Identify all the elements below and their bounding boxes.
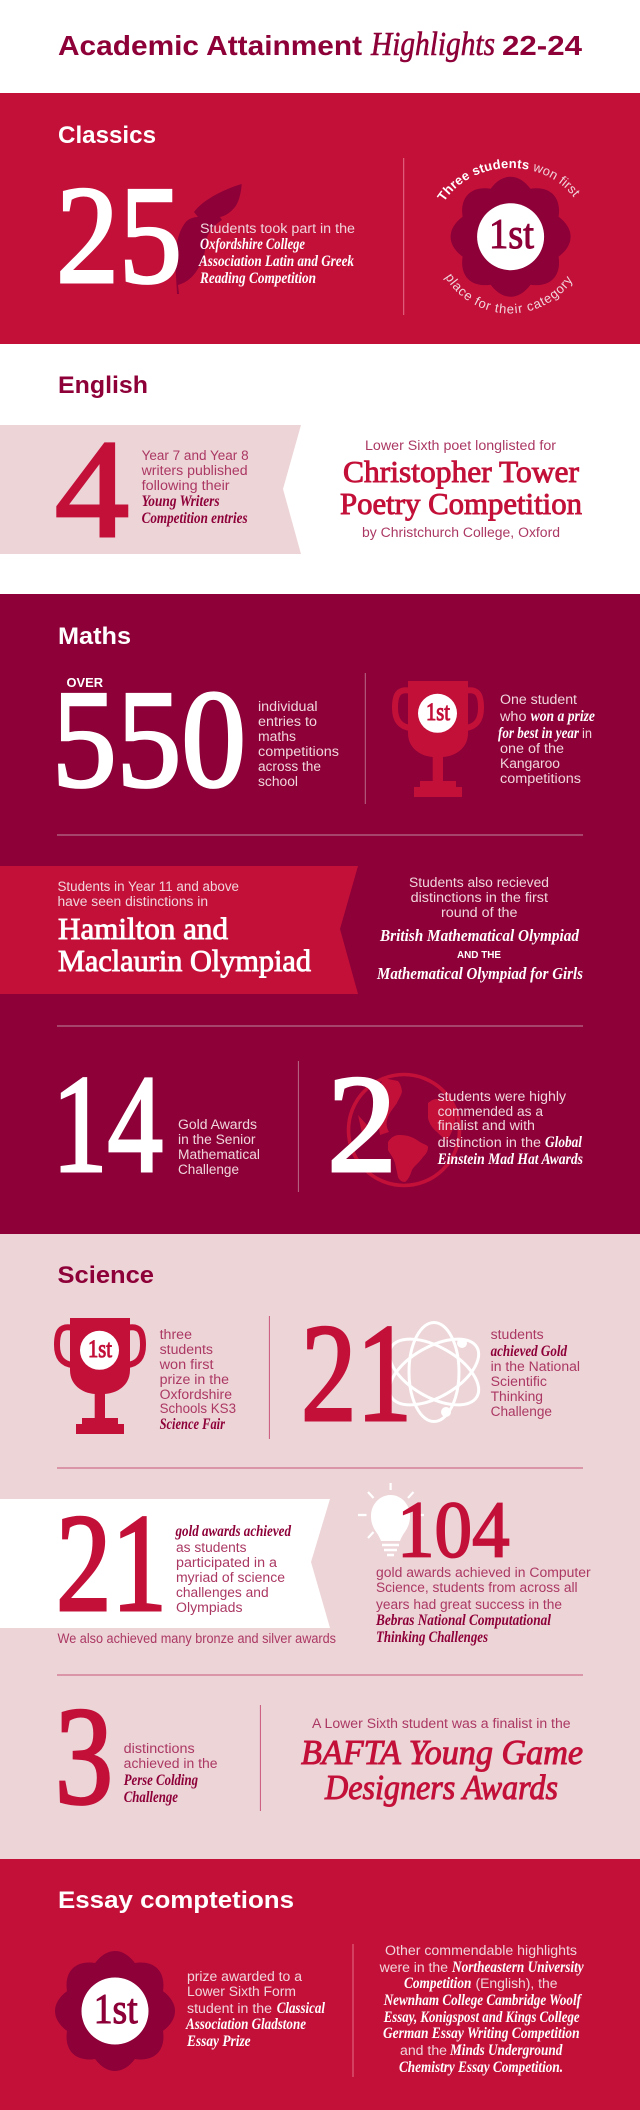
text block: individual entries: maths — [258, 729, 296, 744]
icon: globe — [348, 1074, 460, 1186]
text block: hamilton and maclaurin: Hamilton and — [58, 911, 228, 946]
panel: maths — [0, 594, 640, 1234]
text block: perse colding: Perse Colding — [123, 1772, 198, 1789]
text block: hamilton and maclaurin — [58, 879, 311, 978]
text block: reading competition: Reading Competition — [199, 270, 316, 287]
text block: bebras: gold awards achieved in Computer — [376, 1565, 591, 1580]
text block: national scientific thinking: in the National — [491, 1359, 580, 1374]
panel: science — [0, 1234, 640, 1859]
title: 22-24 — [502, 30, 582, 61]
text block: gladstone prize: Lower Sixth Form — [187, 1984, 296, 1999]
panel: classics — [0, 93, 640, 344]
text block: young writers: Year 7 and Year 8 — [142, 448, 249, 463]
text block: bebras: Thinking Challenges — [376, 1629, 488, 1646]
text block: kangaroo — [498, 692, 595, 786]
text block: gold awards achieved: challenges and — [176, 1585, 269, 1600]
text block: gold awards achieved — [175, 1523, 292, 1615]
text block: gold awards: Gold Awards — [178, 1117, 257, 1132]
text block: gladstone prize: student in the — [187, 2001, 272, 2016]
text block: science fair: Schools KS3 — [160, 1401, 236, 1416]
text block: other highlights: Essay, Konigspost and Kings College — [383, 2009, 580, 2026]
badge: first place — [55, 1951, 175, 2071]
text block: christopher tower: Poetry Competition — [340, 486, 582, 521]
text block: other highlights: and the — [400, 2043, 447, 2058]
badge: first place: 1st — [94, 1987, 138, 2033]
text block: gold awards achieved: participated in a — [176, 1555, 278, 1570]
text block: perse colding: Challenge — [124, 1789, 178, 1806]
text block: perse colding: distinctions — [124, 1741, 195, 1756]
text block: national scientific thinking — [491, 1327, 580, 1419]
title — [58, 26, 582, 63]
badge: first place: place for their category — [443, 274, 572, 314]
text block: christopher tower — [340, 438, 582, 540]
text block: bebras: Bebras National Computational — [375, 1612, 551, 1629]
text block: gold awards achieved: as students — [176, 1540, 247, 1555]
text block: national scientific thinking: achieved Gold — [491, 1343, 568, 1360]
text block: science fair: Science Fair — [160, 1416, 226, 1433]
badge: first place: 1st — [489, 212, 534, 258]
note: bronze and silver: We also achieved many bronze and silver awards — [58, 1631, 336, 1646]
icon: atom — [379, 1322, 489, 1422]
text block: science fair: won first — [159, 1357, 214, 1372]
text block: national scientific thinking: Thinking — [491, 1389, 543, 1404]
text block: reading competition: Oxfordshire College — [200, 236, 305, 253]
text block: national scientific thinking: students — [491, 1327, 544, 1342]
ribbon: white — [0, 1499, 330, 1628]
text block: perse colding — [123, 1741, 218, 1806]
text block: bafta: Designers Awards — [324, 1768, 558, 1807]
text block: perse colding: achieved in the — [124, 1756, 218, 1771]
text block: other highlights: Competition — [404, 1975, 471, 1992]
text block: kangaroo: who — [499, 709, 526, 724]
text block: young writers: Competition entries — [142, 510, 248, 527]
text block: gladstone prize: prize awarded to a — [187, 1969, 302, 1984]
text block: bebras — [375, 1565, 591, 1646]
icon: trophy: 1st — [426, 699, 450, 726]
text block: other highlights: Northeastern University — [451, 1959, 584, 1976]
text block: hamilton and maclaurin: Students in Year 11 and above — [58, 879, 239, 894]
text block: gladstone prize: Association Gladstone — [185, 2016, 306, 2033]
text block: british olympiad: British Mathematical Olympiad — [379, 926, 579, 945]
text block: gladstone prize — [185, 1969, 325, 2050]
icon: trophy — [395, 681, 481, 797]
text block: individual entries: school — [258, 774, 298, 789]
text block: gladstone prize: Essay Prize — [186, 2033, 251, 2050]
stat: 25: 25 — [56, 158, 182, 313]
text block: national scientific thinking: Scientific — [491, 1374, 547, 1389]
text block: reading competition: Students took part in the — [200, 221, 355, 236]
text block: gold awards: Mathematical — [178, 1147, 260, 1162]
text block: gladstone prize: Classical — [277, 2000, 325, 2017]
text block: science fair: three — [160, 1327, 192, 1342]
text block: individual entries — [258, 699, 339, 789]
title: Academic Attainment — [58, 30, 362, 61]
heading: science: Science — [58, 1262, 154, 1289]
text block: british olympiad: distinctions in the first — [411, 890, 548, 905]
text block: reading competition: Association Latin and Greek — [198, 253, 354, 270]
heading: classics: Classics — [58, 122, 156, 149]
text block: kangaroo: Kangaroo — [500, 756, 560, 771]
stat: 4: 4 — [55, 412, 129, 567]
stat: 14: 14 — [52, 1047, 163, 1202]
panel: essay competitions — [0, 1859, 640, 2110]
stat: 104: 104 — [397, 1486, 510, 1574]
text block: science fair: Oxfordshire — [160, 1387, 232, 1402]
text block: mad hat awards: Global — [545, 1134, 582, 1151]
text block: british olympiad: round of the — [441, 905, 518, 920]
heading: maths: Maths — [58, 623, 131, 650]
text block: hamilton and maclaurin: Maclaurin Olympiad — [58, 943, 311, 978]
stat: 550: 550 — [52, 662, 246, 817]
text block: kangaroo: for best in year — [498, 725, 580, 742]
icon: trophy — [57, 1318, 143, 1434]
ribbon: crimson — [0, 866, 358, 994]
text block: bafta: A Lower Sixth student was a finalist in the — [312, 1716, 571, 1731]
text block: hamilton and maclaurin: have seen distinctions in — [58, 894, 208, 909]
text block: bebras: Science, students from across all — [376, 1580, 578, 1595]
text block: mad hat awards — [437, 1089, 583, 1168]
text block: individual entries: across the — [258, 759, 321, 774]
text block: christopher tower: Christopher Tower — [343, 454, 580, 489]
text block: mad hat awards: finalist and with — [438, 1118, 535, 1133]
text block: mad hat awards: distinction in the — [438, 1135, 541, 1150]
text block: mad hat awards: students were highly — [438, 1089, 566, 1104]
text block: other highlights: Newnham College Cambridge Woolf — [383, 1992, 582, 2009]
text block: british olympiad: Students also recieved — [409, 875, 549, 890]
text block: christopher tower: by Christchurch College, Oxford — [362, 525, 560, 540]
text block: science fair — [159, 1327, 236, 1433]
text block: young writers: Young Writers — [142, 493, 220, 510]
stat: 3: 3 — [55, 1679, 113, 1834]
badge: first place: Three students won first — [436, 159, 580, 200]
text block: kangaroo: in — [582, 726, 592, 741]
text block: christopher tower: Lower Sixth poet longlisted for — [365, 438, 557, 453]
text block: science fair: prize in the — [160, 1372, 229, 1387]
text block: kangaroo: won a prize — [531, 708, 595, 725]
text block: reading competition — [198, 221, 355, 287]
text block: other highlights: Chemistry Essay Competition. — [399, 2059, 563, 2076]
text block: other highlights: German Essay Writing Competition — [383, 2025, 580, 2042]
text block: british olympiad: AND THE — [457, 950, 501, 961]
text block: other highlights: Minds Underground — [449, 2042, 563, 2059]
text block: gold awards achieved: Olympiads — [176, 1600, 243, 1615]
text block: bafta: BAFTA Young Game — [301, 1733, 583, 1772]
text block: british olympiad: Mathematical Olympiad for Girls — [376, 964, 583, 983]
title: Highlights — [370, 26, 495, 63]
text block: other highlights: (English), the — [476, 1976, 558, 1991]
badge: first place — [436, 159, 580, 314]
text block: kangaroo: competitions — [500, 771, 581, 786]
text block: science fair: students — [160, 1342, 213, 1357]
text block: young writers: following their — [142, 478, 230, 493]
stat: 21 gold: 21 — [56, 1486, 167, 1641]
text block: gold awards — [178, 1117, 260, 1177]
text block: mad hat awards: commended as a — [438, 1104, 543, 1119]
ribbon: pink — [0, 425, 301, 554]
icon: trophy: 1st — [88, 1336, 112, 1363]
text block: young writers: writers published — [141, 463, 248, 478]
text block: other highlights: Other commendable highlights — [385, 1943, 577, 1958]
heading: essay competitions: Essay comptetions — [58, 1887, 294, 1914]
stat: 2: 2 — [327, 1047, 397, 1202]
text block: gold awards: Challenge — [178, 1162, 239, 1177]
heading: english: English — [58, 372, 148, 399]
icon: light bulb — [358, 1483, 424, 1555]
text block: other highlights: were in the — [379, 1960, 448, 1975]
text block: individual entries: individual — [258, 699, 318, 714]
text block: kangaroo: one of the — [500, 741, 564, 756]
text block: mad hat awards: Einstein Mad Hat Awards — [437, 1151, 583, 1168]
panel: english — [0, 372, 582, 567]
text block: bebras: years had great success in the — [376, 1597, 562, 1612]
text block: bafta — [301, 1716, 583, 1807]
text block: kangaroo: One student — [500, 692, 577, 707]
text block: other highlights — [379, 1943, 584, 2076]
text block: gold awards: in the Senior — [178, 1132, 256, 1147]
text block: young writers — [141, 448, 249, 527]
text block: gold awards achieved: myriad of science — [176, 1570, 285, 1585]
text block: individual entries: competitions — [258, 744, 339, 759]
text block: british olympiad — [376, 875, 583, 983]
label: over: OVER — [66, 675, 104, 690]
stat: 21 national: 21 — [301, 1296, 412, 1451]
text block: gold awards achieved: gold awards achieved — [175, 1523, 292, 1540]
icon: quill — [175, 184, 242, 294]
text block: individual entries: entries to — [258, 714, 317, 729]
text block: national scientific thinking: Challenge — [491, 1404, 552, 1419]
